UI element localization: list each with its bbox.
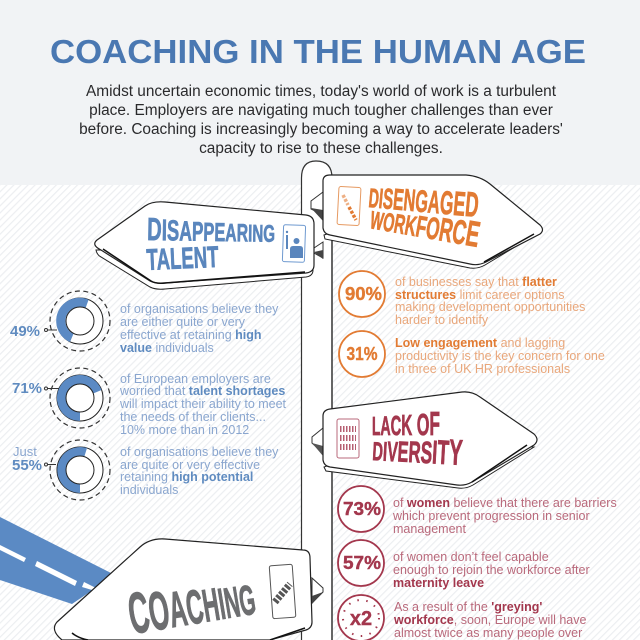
stat: 90%: structures limit career options: [395, 288, 565, 302]
stat: 71% donut: the needs of their clients...: [120, 410, 266, 424]
stat: 71% donut: 71%: [12, 380, 42, 397]
stat: 57%: of women don’t feel capable: [393, 550, 549, 564]
stat: 55% donut: 55%: [12, 457, 42, 474]
icon: grid: [337, 419, 359, 458]
sign heading: DISAPPEARING: [147, 211, 275, 249]
stat: 73%: of women believe that there are barriers: [393, 496, 617, 510]
intro text: before. Coaching is increasingly becoming a way to accelerate leaders': [79, 121, 563, 138]
stat: 90%: harder to identify: [395, 313, 489, 327]
stat: 71% donut: [12, 368, 287, 437]
stat: 31%: in three of UK HR professionals: [395, 362, 570, 376]
road: [0, 517, 115, 604]
icon: chain: [337, 186, 361, 226]
stat: 73%: [338, 486, 617, 536]
stat: 55% donut: of organisations believe they: [120, 445, 279, 459]
title: COACHING IN THE HUMAN AGE: [50, 33, 586, 70]
stat: 57%: maternity leave: [393, 576, 484, 590]
icon: handshake: [269, 564, 296, 619]
stat: 31%: productivity is the key concern for one: [395, 349, 605, 363]
stat: 49% donut: effective at retaining high: [120, 328, 262, 342]
stat: 55% donut: are quite or very effective: [120, 458, 260, 472]
stat: x2: almost twice as many people over: [394, 626, 582, 640]
intro text: Amidst uncertain economic times, today's world of work is a turbulent: [86, 83, 557, 100]
stat: 90%: making development opportunities: [395, 300, 585, 314]
stat: 71% donut: of European employers are: [120, 372, 271, 386]
sign: disappearing talent: [95, 202, 314, 289]
sign: lack of diversity: [323, 392, 537, 488]
stat: 90%: 90%: [345, 284, 382, 304]
stat: 49% donut: of organisations believe they: [120, 302, 279, 316]
sign: disengaged workforce: WORKFORCE: [368, 196, 483, 255]
sign: disappearing talent: TALENT: [146, 241, 219, 277]
intro text: capacity to rise to these challenges.: [199, 140, 443, 157]
stat: 55% donut: Just: [13, 444, 37, 459]
stat: x2: x2: [350, 608, 372, 630]
stat: x2: As a result of the 'greying': [394, 600, 542, 614]
stat: 31%: [339, 331, 605, 377]
sign: disengaged workforce: [323, 175, 542, 268]
stat: 71% donut: will impact their ability to meet: [119, 397, 287, 411]
stat: 49% donut: [10, 291, 279, 355]
stat: x2: workforce, soon, Europe will have: [393, 613, 587, 627]
sign heading: DISENGAGED: [367, 176, 480, 225]
stat: 55% donut: individuals: [120, 483, 178, 497]
stat: 57%: 57%: [343, 553, 381, 573]
stat: 71% donut: 10% more than in 2012: [120, 423, 249, 437]
connector brackets: [311, 192, 323, 456]
stat: 49% donut: 49%: [10, 323, 40, 340]
stat: x2: [338, 595, 587, 640]
sign heading: LACK OF: [372, 405, 440, 442]
stat: 73%: 73%: [343, 499, 381, 519]
stat: 57%: enough to rejoin the workforce after: [393, 563, 590, 577]
stat: 49% donut: value individuals: [120, 341, 214, 355]
stat: 31%: 31%: [346, 344, 378, 364]
stat: 57%: [338, 540, 590, 590]
signpost: [302, 161, 332, 640]
stat: 55% donut: retaining high potential: [120, 470, 253, 484]
intro text: [79, 83, 563, 157]
stat: 31%: Low engagement and lagging: [395, 336, 565, 350]
sign: lack of diversity: DIVERSITY: [372, 427, 464, 473]
stat: 73%: which prevent progression in senior: [392, 509, 590, 523]
icon: person: [282, 225, 306, 262]
intro text: place. Employers are navigating much tougher challenges than ever: [89, 102, 553, 119]
sign: coaching: [54, 539, 323, 640]
stat: 49% donut: are either quite or very: [120, 315, 246, 329]
stat: 71% donut: worried that talent shortages: [119, 384, 285, 398]
stat: 55% donut: [12, 440, 279, 500]
stat: 90%: [339, 271, 585, 327]
stat: 90%: of businesses say that flatter: [395, 275, 557, 289]
stat: 73%: management: [393, 522, 466, 536]
